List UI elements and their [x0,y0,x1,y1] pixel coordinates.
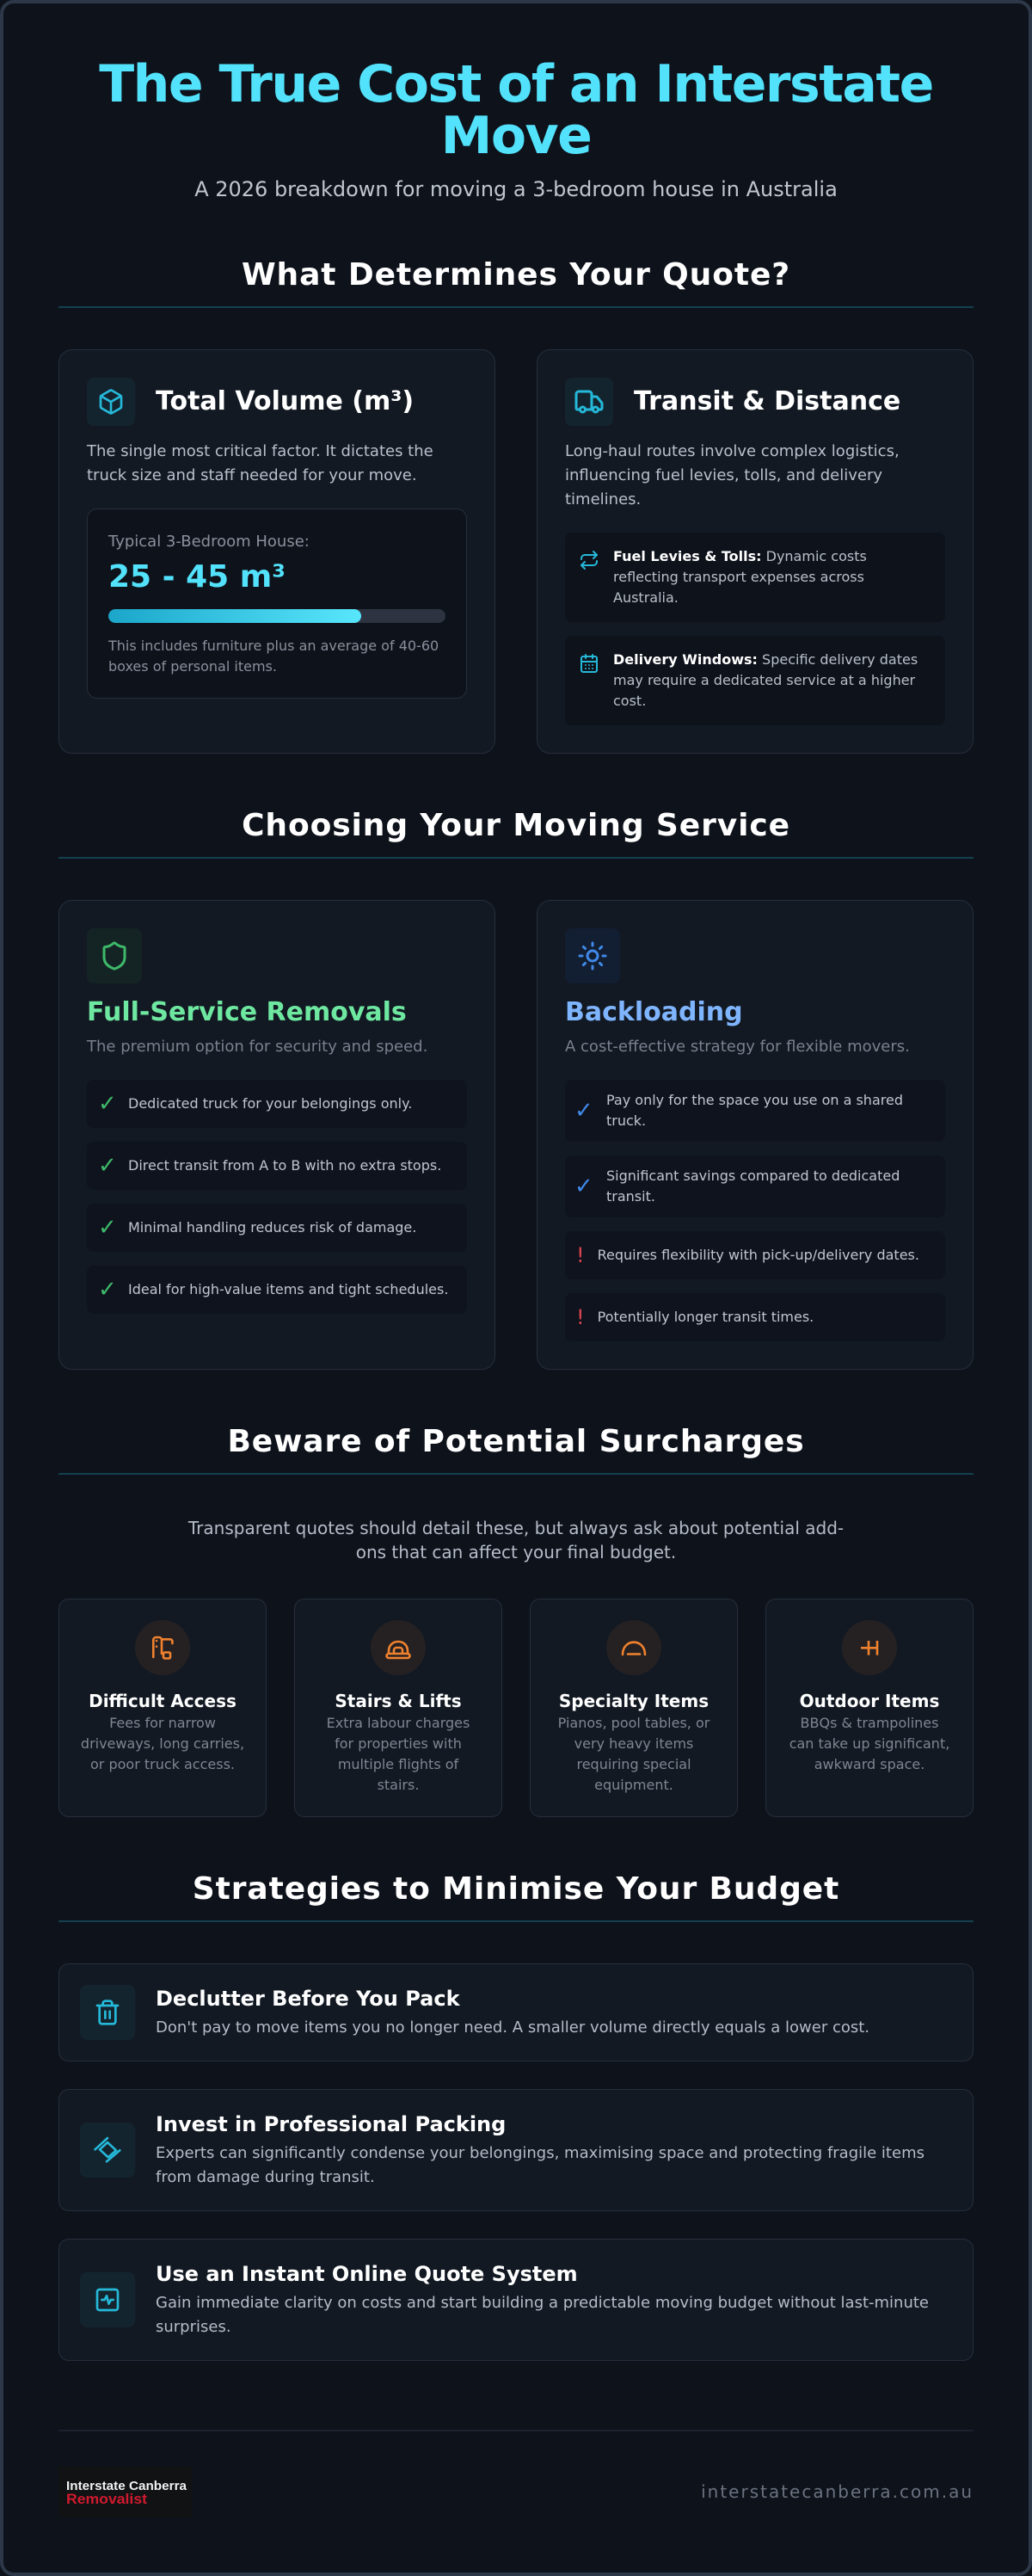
section: choosing your moving service [58,808,974,1370]
typical house volume callout [87,508,467,699]
card heading: Stairs & Lifts [335,1691,462,1711]
website url: interstatecanberra.com.au [701,2481,974,2502]
icon: outdoor [842,1620,897,1675]
caveat: flexibility: Requires flexibility with pick-up/delivery dates. [598,1247,919,1263]
service heading: Full-Service Removals [87,997,407,1027]
tip heading: Use an Instant Online Quote System [156,2262,578,2286]
detail: delivery windows [565,636,945,725]
panel: full-service removals [58,900,495,1370]
tip description: Gain immediate clarity on costs and start building a predictable moving budget without last-minute surprises. [156,2294,929,2336]
feature: ideal for high-value: Ideal for high-value items and tight schedules. [128,1281,448,1297]
detail: fuel levies [565,533,945,622]
transit description: Long-haul routes involve complex logistics, influencing fuel levies, tolls, and delivery timelines. [565,442,900,508]
caveat: longer transit [565,1293,945,1341]
callout label: Typical 3-Bedroom House: [108,533,310,551]
card heading: Outdoor Items [800,1691,939,1711]
feature: ideal for high-value: ✓ [98,1277,117,1303]
callout note: This includes furniture plus an average of 40-60 boxes of personal items. [108,638,439,675]
panel: backloading [537,900,974,1370]
intro text: Transparent quotes should detail these, but always ask about potential add-ons that can affect your final budget. [188,1518,844,1562]
section heading: Beware of Potential Surcharges [227,1424,805,1459]
card: stairs and lifts [294,1599,502,1817]
feature: minimal handling [87,1204,467,1252]
card: specialty items [530,1599,738,1817]
logo: Removalist [66,2492,148,2507]
tip description: Experts can significantly condense your belongings, maximising space and protecting fragile items from damage during transit. [156,2144,924,2186]
section heading: Strategies to Minimise Your Budget [193,1871,839,1907]
footer [58,2430,974,2517]
callout value: 25 - 45 m³ [108,559,286,595]
card description: Fees for narrow driveways, long carries, or poor truck access. [81,1715,244,1772]
panel: transit and distance [537,349,974,754]
transit header [565,378,900,426]
packing text [156,2112,924,2186]
icon: package diamond [80,2123,135,2178]
feature: pay only for space [565,1080,945,1142]
icon: repeat arrows [580,551,598,570]
icon: lift [371,1620,426,1675]
card description: Pianos, pool tables, or very heavy items requiring special equipment. [558,1715,710,1793]
card description: Extra labour charges for properties with multiple flights of stairs. [327,1715,470,1793]
panel: total volume [58,349,495,754]
feature: direct transit: Direct transit from A to B with no extra stops. [128,1157,441,1174]
caveat: longer transit: ! [576,1305,585,1329]
progress bar [108,609,445,623]
section heading [58,1425,974,1475]
card: outdoor items [765,1599,974,1817]
feature: dedicated truck: Dedicated truck for your belongings only. [128,1095,412,1112]
surcharge cards [58,1599,974,1817]
subtitle: A 2026 breakdown for moving a 3-bedroom house in Australia [194,177,838,201]
volume header [87,378,414,426]
quote factor panels [58,349,974,754]
tip: declutter [58,1963,974,2061]
feature: dedicated truck: ✓ [98,1091,117,1117]
caveat: flexibility [565,1231,945,1279]
card heading: Difficult Access [89,1691,236,1711]
section: potential surcharges [58,1424,974,1817]
transit heading: Transit & Distance [634,386,900,416]
card: difficult access [58,1599,267,1817]
service heading: Backloading [565,997,743,1027]
tip: instant online quote [58,2239,974,2361]
feature: significant savings [565,1156,945,1217]
icon: piano [606,1620,661,1675]
section heading [58,809,974,859]
feature: pay only for space: ✓ [574,1098,593,1124]
delivery windows text: Delivery Windows: Specific delivery dates may require a dedicated service at a higher cost. [613,651,918,709]
volume heading: Total Volume (m³) [156,386,414,416]
feature: pay only for space: Pay only for the space you use on a shared truck. [606,1092,903,1129]
section: what determines your quote [58,257,974,754]
feature: minimal handling: Minimal handling reduces risk of damage. [128,1219,416,1236]
service comparison panels [58,900,974,1370]
logo [66,2480,187,2507]
icon: cube [87,378,135,426]
tip description: Don't pay to move items you no longer need. A smaller volume directly equals a lower cost. [156,2018,869,2037]
tip heading: Declutter Before You Pack [156,1987,460,2011]
section: strategies to minimise budget [58,1871,974,2361]
logo: Interstate Canberra [66,2480,187,2493]
feature: dedicated truck [87,1080,467,1128]
icon: shield [87,928,142,983]
title: The True Cost of an Interstate Move [99,54,933,166]
tip heading: Invest in Professional Packing [156,2112,506,2136]
service subtitle: The premium option for security and speed. [87,1038,427,1056]
feature: direct transit: ✓ [98,1153,117,1179]
icon: trash [80,1985,135,2040]
volume description: The single most critical factor. It dictates the truck size and staff needed for your move. [87,442,433,484]
icon: pulse square [80,2272,135,2327]
quote text [156,2262,929,2336]
section heading: What Determines Your Quote? [242,257,790,293]
caveat: flexibility: ! [576,1243,585,1267]
icon: sun [565,928,620,983]
icon: truck [565,378,613,426]
card heading: Specialty Items [559,1691,709,1711]
icon: calendar [580,654,598,673]
feature: significant savings: ✓ [574,1174,593,1199]
feature: significant savings: Significant savings compared to dedicated transit. [606,1168,900,1205]
section heading [58,258,974,308]
icon: access [135,1620,190,1675]
service subtitle: A cost-effective strategy for flexible movers. [565,1038,910,1056]
card description: BBQs & trampolines can take up significant, awkward space. [789,1715,949,1772]
feature: direct transit [87,1142,467,1190]
feature: ideal for high-value [87,1266,467,1314]
fuel levies text: Fuel Levies & Tolls: Dynamic costs reflecting transport expenses across Australia. [613,548,867,606]
feature: minimal handling: ✓ [98,1215,117,1241]
section heading [58,1872,974,1922]
declutter text [156,1987,869,2037]
section heading: Choosing Your Moving Service [242,808,790,843]
tip: professional packing [58,2089,974,2211]
caveat: longer transit: Potentially longer transit times. [598,1309,814,1325]
